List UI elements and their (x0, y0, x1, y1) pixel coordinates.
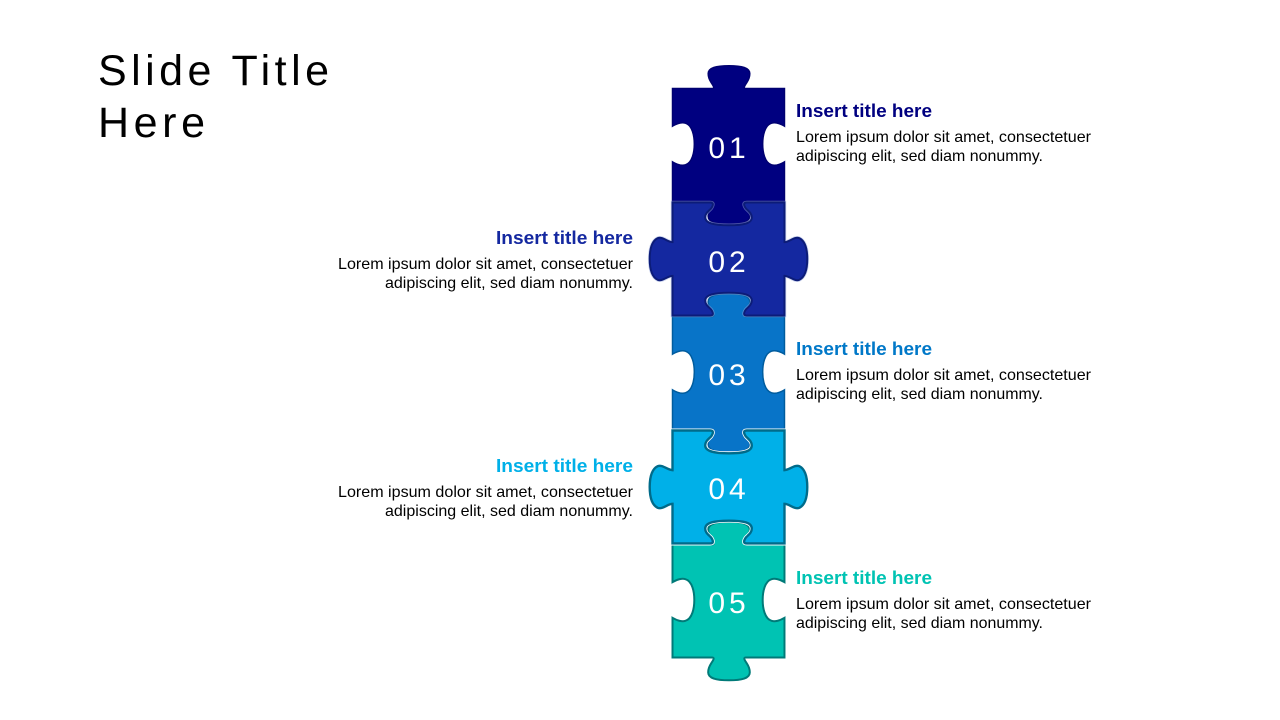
text block 03 (796, 339, 1092, 403)
puzzle piece 02 (650, 202, 807, 315)
heading 02: Insert title here (496, 228, 633, 248)
number 04: 04 (708, 473, 750, 506)
heading 03: Insert title here (796, 339, 932, 359)
body 05 line 2: adipiscing elit, sed diam nonummy. (796, 615, 1043, 632)
body 01 line 1: Lorem ipsum dolor sit amet, consectetuer (796, 129, 1092, 146)
body 05 line 1: Lorem ipsum dolor sit amet, consectetuer (796, 596, 1092, 613)
title second line: Here (98, 99, 205, 147)
puzzle piece 03 (672, 294, 784, 452)
text block 04 (338, 456, 634, 520)
body 02 line 2: adipiscing elit, sed diam nonummy. (385, 275, 633, 292)
puzzle piece 01 (672, 66, 784, 224)
text block 05 (796, 568, 1092, 632)
body 03 line 1: Lorem ipsum dolor sit amet, consectetuer (796, 367, 1092, 384)
text block 02 (338, 228, 634, 292)
heading 01: Insert title here (796, 101, 932, 121)
heading 04: Insert title here (496, 456, 633, 476)
title: Slide Title (98, 47, 329, 95)
number 03: 03 (708, 359, 750, 392)
puzzle piece 05 (672, 522, 784, 680)
heading 05: Insert title here (796, 568, 932, 588)
text block 01 (796, 101, 1092, 165)
body 04 line 1: Lorem ipsum dolor sit amet, consectetuer (338, 484, 634, 501)
number 01: 01 (708, 132, 750, 165)
body 03 line 2: adipiscing elit, sed diam nonummy. (796, 386, 1043, 403)
number 02: 02 (708, 246, 750, 279)
number 05: 05 (708, 587, 750, 620)
body 04 line 2: adipiscing elit, sed diam nonummy. (385, 503, 633, 520)
body 01 line 2: adipiscing elit, sed diam nonummy. (796, 148, 1043, 165)
puzzle column (650, 66, 807, 680)
body 02 line 1: Lorem ipsum dolor sit amet, consectetuer (338, 256, 634, 273)
puzzle piece 04 (650, 430, 807, 543)
